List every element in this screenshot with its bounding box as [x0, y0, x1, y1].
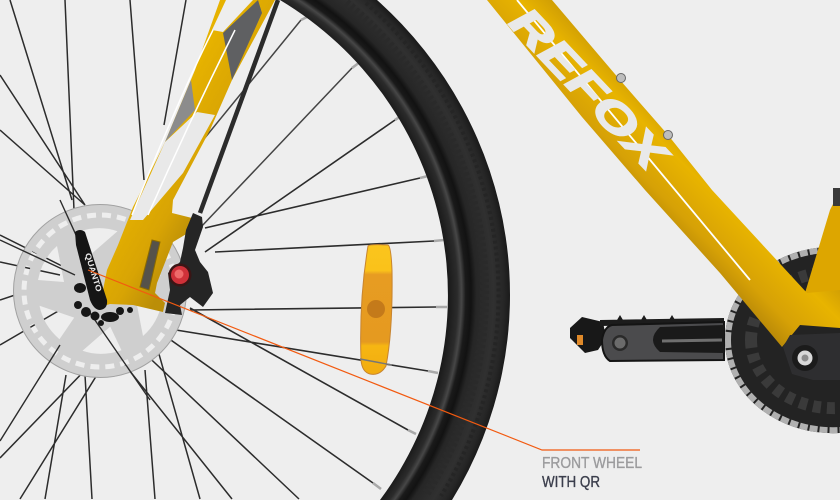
cable bosses — [616, 74, 626, 82]
caliper body — [165, 213, 213, 315]
spoke nipples — [301, 15, 447, 489]
tube highlight — [517, 0, 750, 280]
pedal reflector — [577, 335, 583, 345]
bottom bracket — [783, 333, 840, 380]
fork leg — [100, 0, 275, 312]
wheel spokes — [0, 0, 436, 499]
grey decal lower — [165, 80, 195, 142]
bracket bolt — [792, 345, 818, 371]
label line two: WITH QR — [542, 474, 600, 491]
brake cable — [200, 0, 278, 213]
down tube — [487, 0, 840, 347]
chainring — [725, 247, 840, 433]
white decal upper — [212, 0, 253, 32]
pedal studs — [600, 315, 724, 326]
brake disc — [13, 204, 187, 378]
fork slot — [140, 240, 160, 290]
pedal — [570, 315, 724, 353]
spoke across reflector — [360, 359, 392, 365]
fork — [100, 0, 275, 312]
pedal axle — [612, 335, 628, 351]
crank slot — [653, 325, 724, 353]
front spokes over disc — [0, 200, 150, 441]
fork highlights — [132, 30, 235, 215]
label line one: FRONT WHEEL — [542, 455, 642, 472]
reflector — [360, 245, 392, 374]
reflector bolt — [367, 300, 385, 318]
quick release lever — [75, 230, 107, 310]
grey decal upper — [223, 0, 262, 80]
red bolt — [168, 264, 192, 286]
hub bolts — [74, 283, 133, 326]
tyre ring — [280, 0, 510, 500]
gear teeth — [751, 272, 838, 408]
lever brand text: QUANTO — [83, 252, 103, 293]
chain — [728, 250, 840, 430]
seat tube fitting — [833, 188, 840, 206]
tyre tread — [346, 3, 499, 496]
reflector body — [361, 245, 392, 374]
white decal lower — [130, 112, 215, 220]
brake caliper — [165, 213, 213, 315]
callout leader line — [88, 270, 640, 450]
tyre and rim — [280, 0, 510, 500]
callout label — [542, 455, 642, 491]
crank arm — [602, 322, 724, 361]
seat tube — [805, 190, 840, 300]
frame logo: REFOX — [500, 0, 678, 182]
